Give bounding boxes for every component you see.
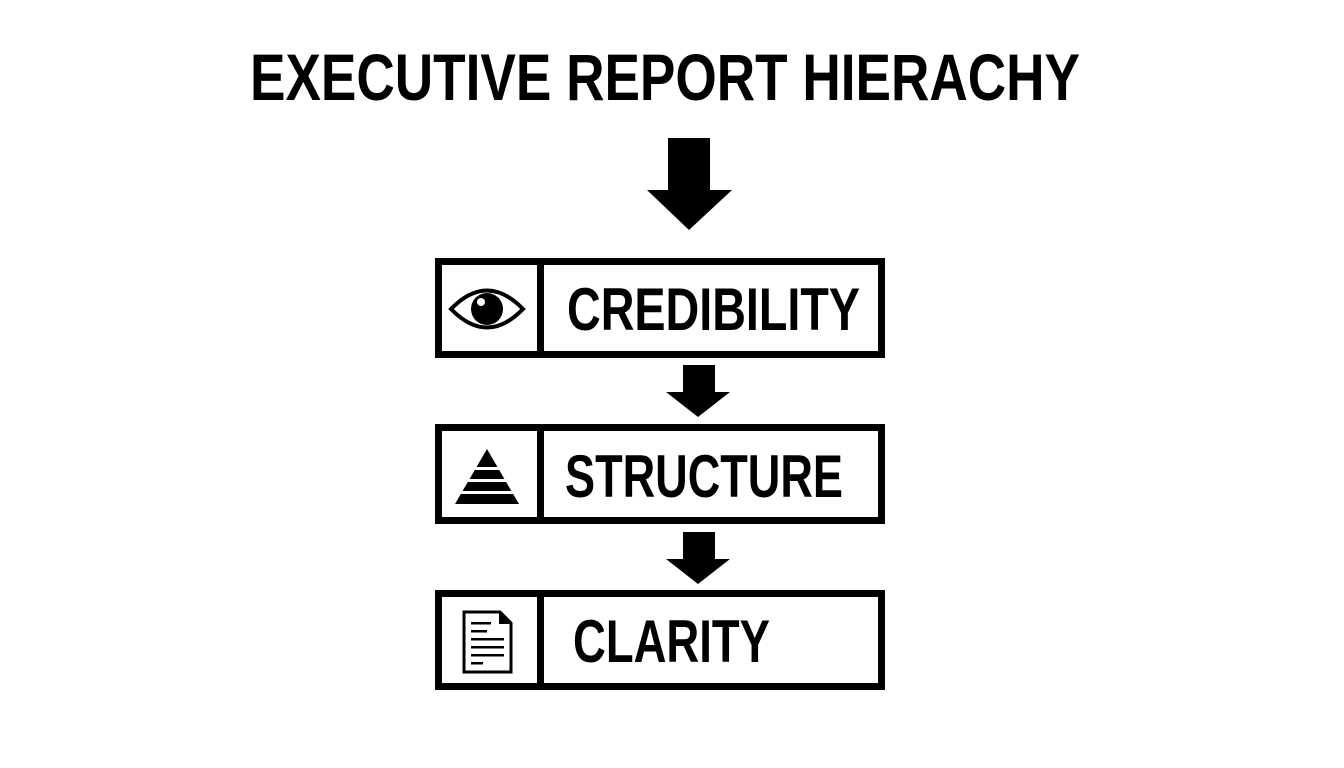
- panel: structure: [438, 427, 882, 521]
- panel: clarity: [438, 593, 882, 687]
- arrow: credibility to structure: [666, 365, 730, 417]
- title: EXECUTIVE REPORT HIERACHY: [250, 40, 1080, 114]
- label: clarity: CLARITY: [573, 608, 770, 675]
- arrow: structure to clarity: [666, 532, 730, 584]
- arrow: title to credibility: [647, 138, 732, 230]
- label: structure: STRUCTURE: [565, 443, 843, 510]
- icon: pyramid: [450, 449, 525, 504]
- icon: eye: [451, 290, 523, 328]
- panel: credibility: [438, 261, 882, 355]
- label: credibility: CREDIBILITY: [567, 276, 860, 343]
- icon: document: [464, 612, 511, 672]
